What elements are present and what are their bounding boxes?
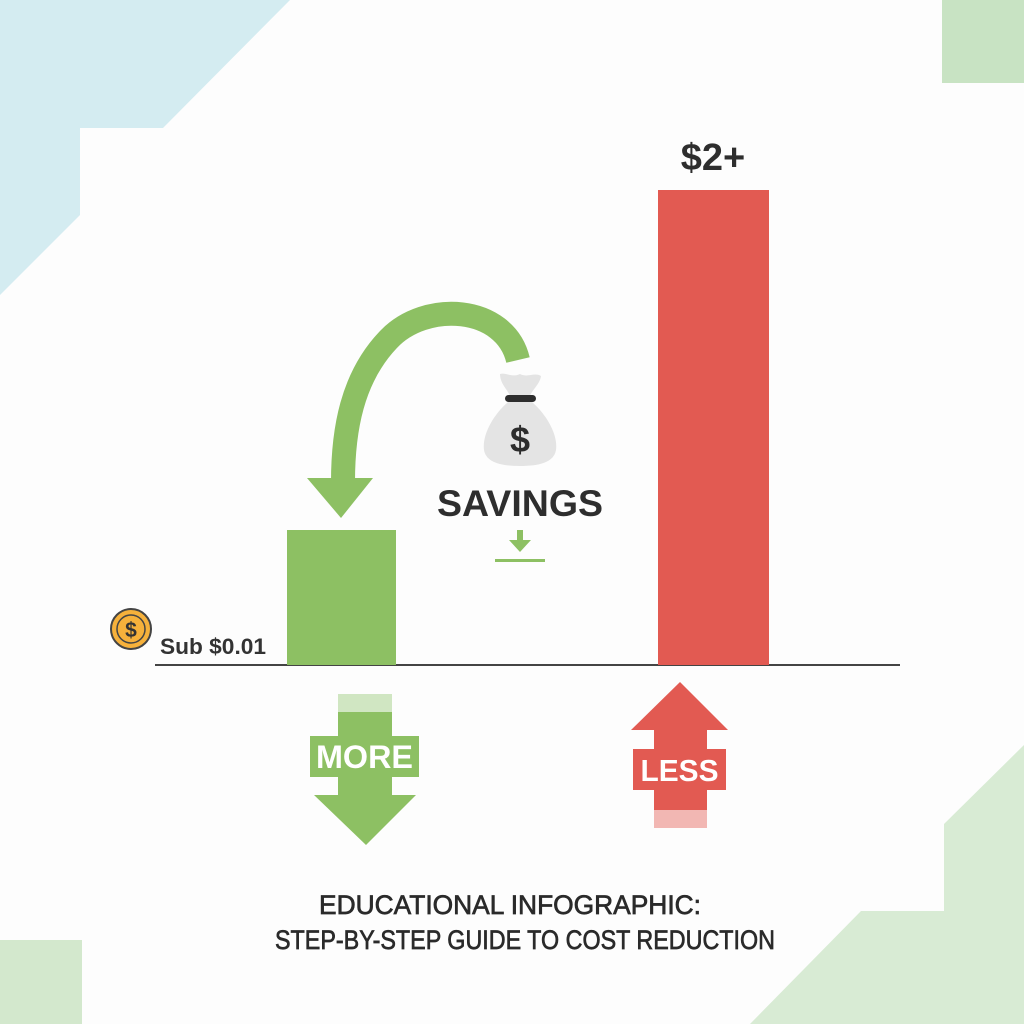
- MORE down arrow: [310, 694, 419, 845]
- green bar: [287, 530, 396, 665]
- coin icon: [111, 609, 151, 649]
- MORE down arrow: MORE: [316, 739, 413, 775]
- title: [275, 890, 775, 955]
- title: EDUCATIONAL INFOGRAPHIC:: [319, 890, 701, 920]
- background: bottom-right green shape: [750, 745, 1024, 1024]
- background: top-right green square: [942, 0, 1024, 83]
- LESS up arrow: [631, 682, 728, 828]
- background: top-left blue shape: [0, 0, 290, 295]
- coin icon: $: [125, 619, 137, 642]
- baseline axis: [155, 664, 900, 666]
- red bar: [658, 190, 769, 665]
- icon: small down arrow: [495, 530, 545, 562]
- icon: money bag: $: [510, 419, 530, 460]
- title: STEP-BY-STEP GUIDE TO COST REDUCTION: [275, 925, 775, 955]
- LESS up arrow: LESS: [640, 753, 718, 788]
- label: SAVINGS: SAVINGS: [437, 483, 603, 524]
- label: Sub $0.01: Sub $0.01: [160, 634, 266, 659]
- curved savings arrow: [307, 314, 518, 518]
- background: bottom-left green square: [0, 940, 82, 1024]
- icon: money bag: [484, 374, 556, 466]
- label: $2+: $2+: [681, 137, 745, 179]
